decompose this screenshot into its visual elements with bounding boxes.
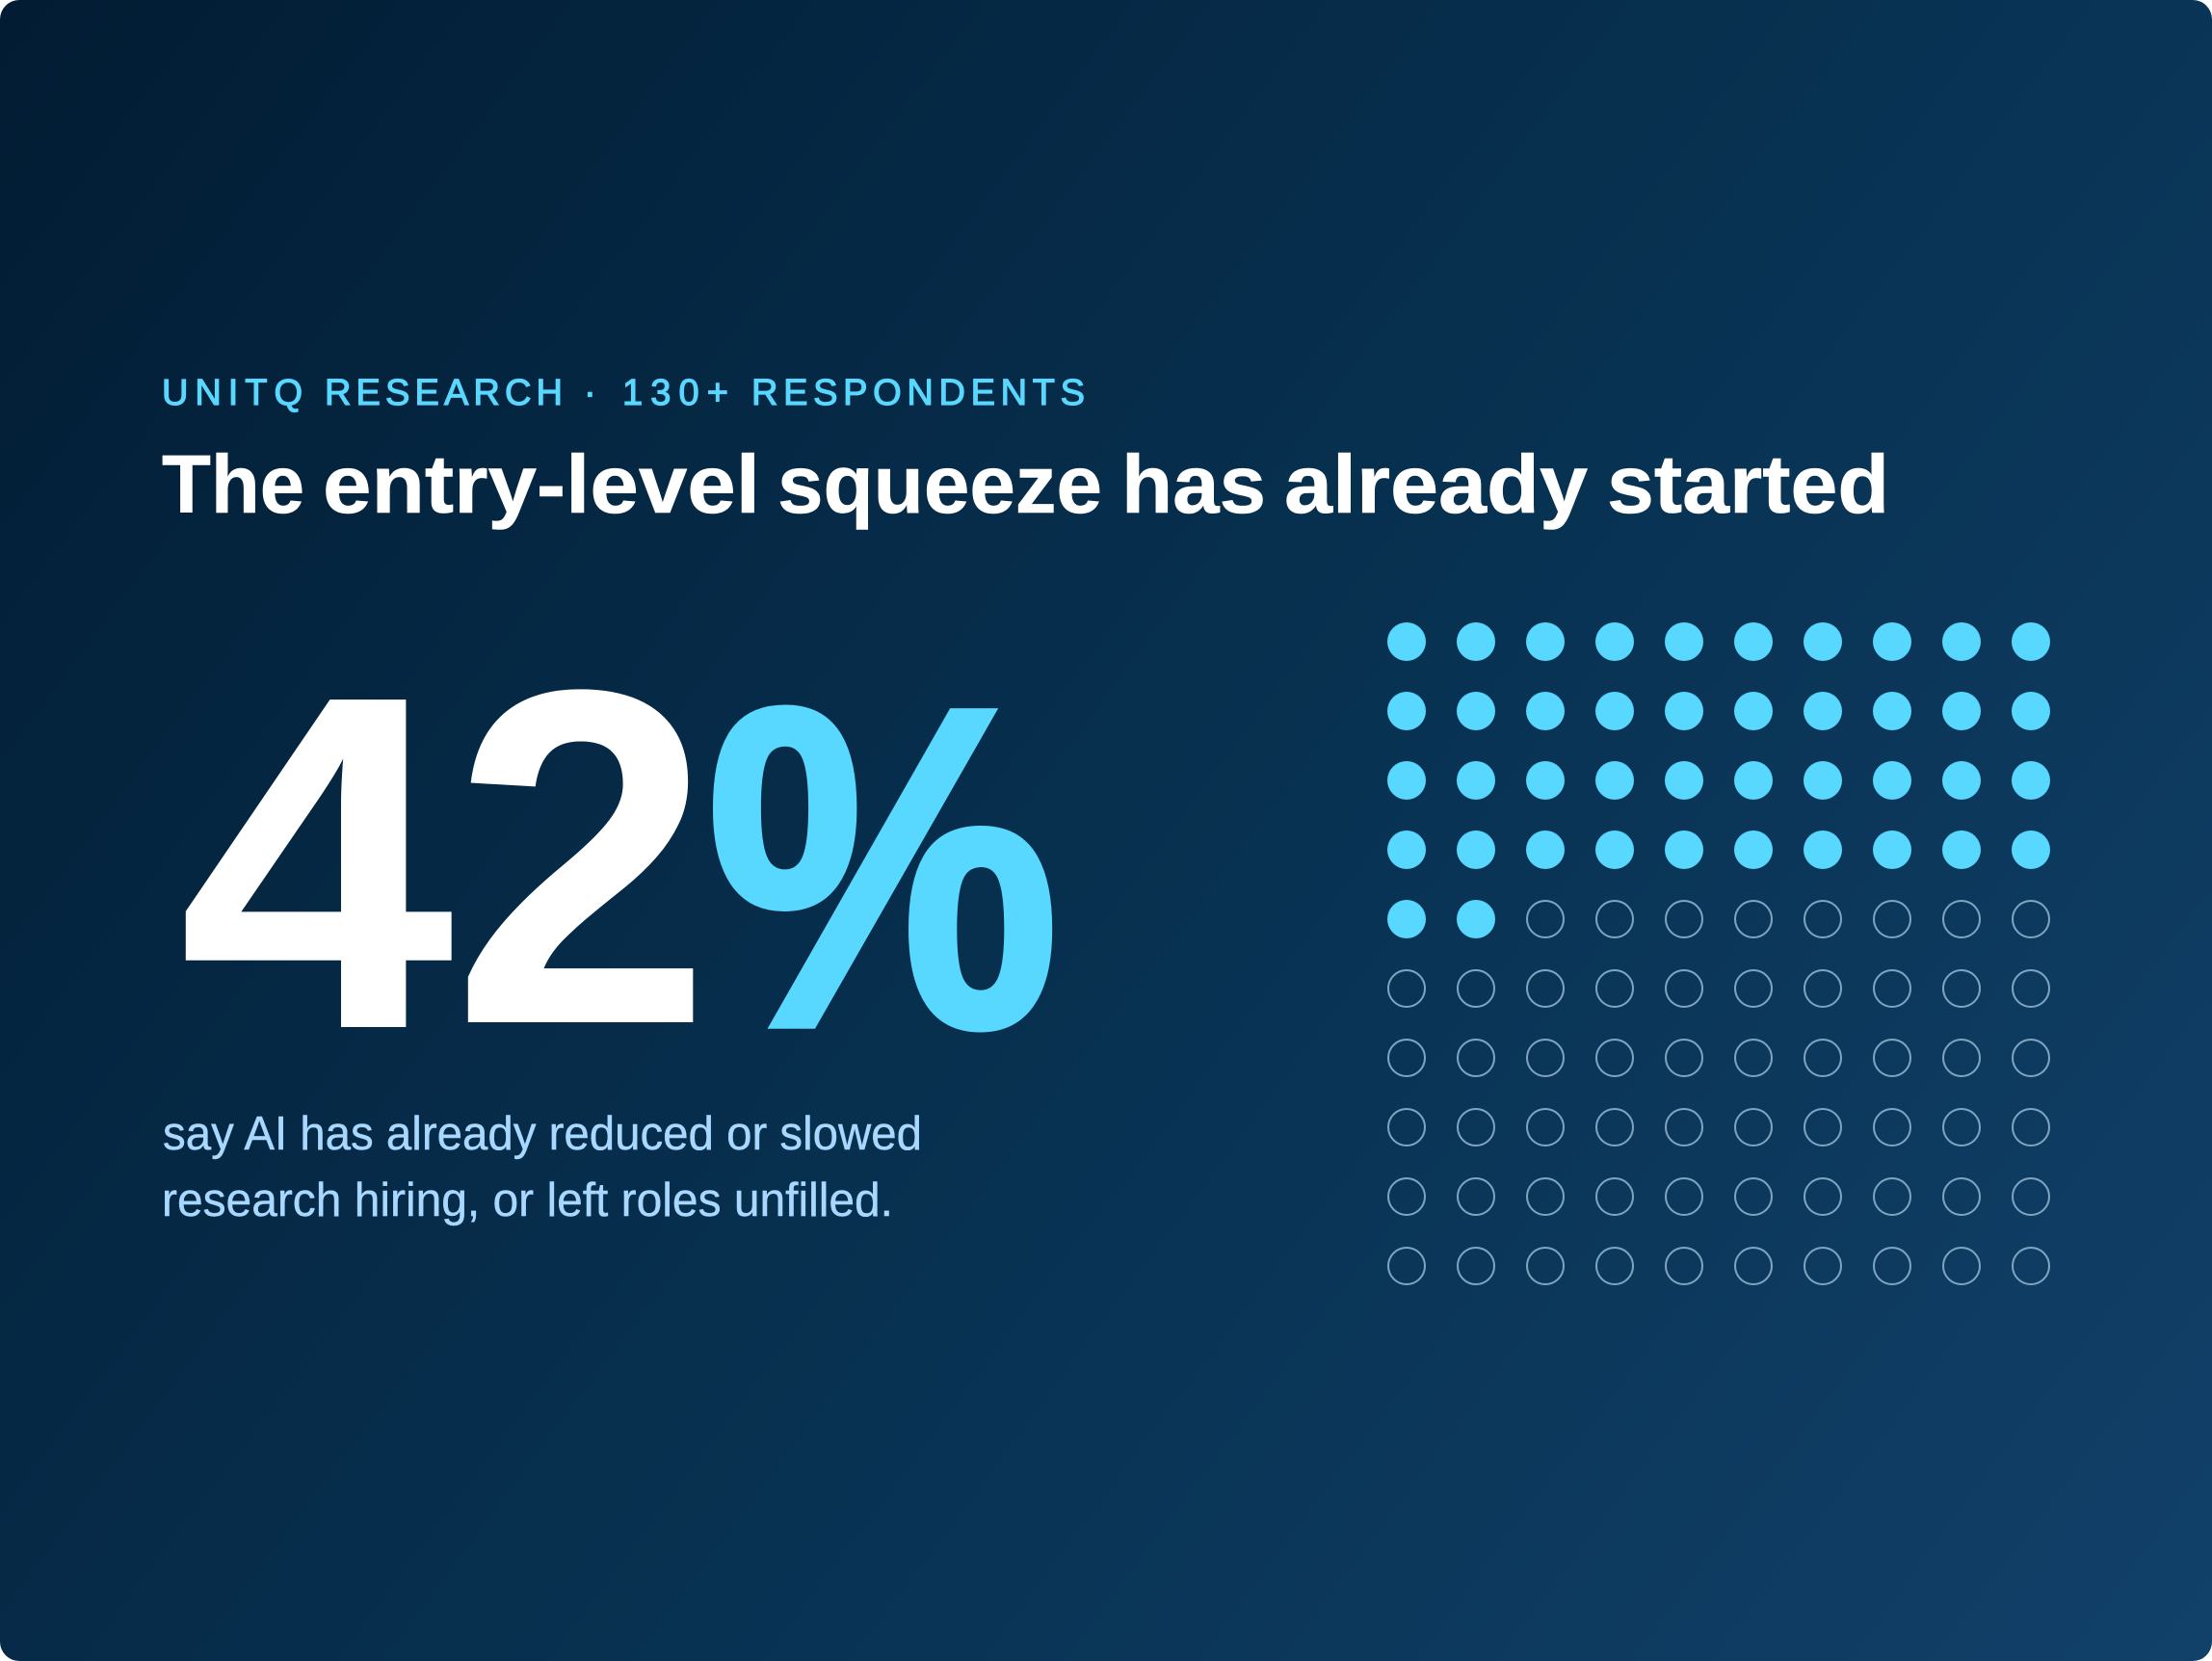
filled dots: 42	[1387, 622, 2050, 938]
empty dots: 58	[1388, 901, 2049, 1284]
digit 2: 2	[452, 590, 712, 1123]
title: started	[1607, 439, 1889, 531]
eyebrow label: ·	[584, 373, 596, 413]
big stat: 42%	[178, 590, 1060, 1128]
stat description	[162, 1108, 922, 1226]
title: entry-level	[323, 439, 760, 531]
percent sign: %	[706, 614, 1060, 1121]
eyebrow label: RESPONDENTS	[751, 373, 1085, 413]
title: already	[1284, 439, 1588, 531]
eyebrow label	[162, 373, 1085, 413]
title: The	[162, 439, 304, 531]
title: has	[1121, 439, 1266, 531]
eyebrow label: 130+	[622, 373, 728, 413]
title: squeeze	[777, 439, 1102, 531]
eyebrow label: RESEARCH	[325, 373, 563, 413]
digit 4: 4	[178, 596, 458, 1128]
title	[162, 439, 1889, 531]
eyebrow label: UNITQ	[162, 373, 303, 413]
description line 1: say AI has already reduced or slowed	[163, 1108, 922, 1160]
description line 2: research hiring, or left roles unfilled.	[162, 1174, 893, 1226]
dot grid: 42 of 100	[1387, 622, 2050, 1284]
